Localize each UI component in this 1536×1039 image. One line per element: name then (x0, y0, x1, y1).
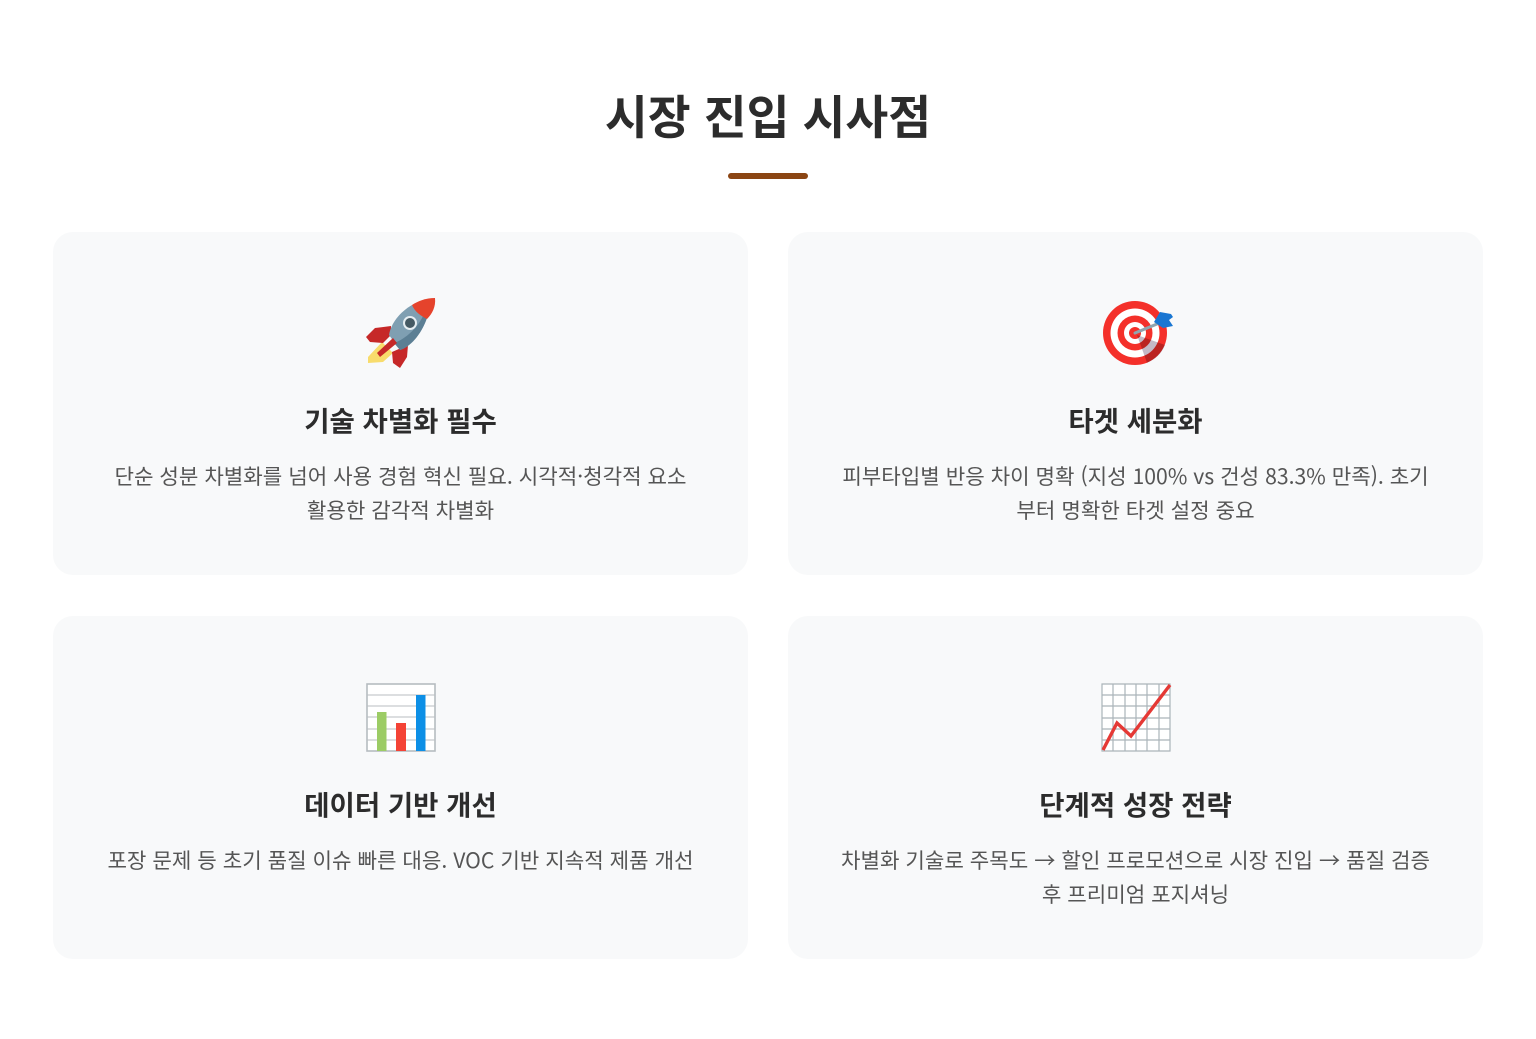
card text (842, 460, 1429, 525)
panel: technology differentiation (53, 232, 748, 575)
card heading: 데이터 기반 개선 (304, 782, 497, 822)
card text: 부터 명확한 타겟 설정 중요 (1016, 494, 1255, 525)
icon: target with dart (1103, 301, 1173, 365)
icon: rocket (366, 298, 436, 368)
panel: target segmentation (788, 232, 1483, 575)
card text: 피부타입별 반응 차이 명확 (지성 100% vs 건성 83.3% 만족). 초기 (842, 460, 1429, 491)
title: 시장 진입 시사점 (605, 80, 931, 148)
card text: 후 프리미엄 포지셔닝 (1042, 878, 1229, 909)
icon: bar chart (366, 683, 436, 752)
card text: 단순 성분 차별화를 넘어 사용 경험 혁신 필요. 시각적·청각적 요소 (114, 460, 687, 491)
title underline (728, 173, 808, 179)
panel: data-driven improvement (53, 616, 748, 959)
icon: line chart (1101, 683, 1172, 752)
card heading: 단계적 성장 전략 (1039, 782, 1232, 822)
card text: 활용한 감각적 차별화 (307, 494, 494, 525)
card text: 포장 문제 등 초기 품질 이슈 빠른 대응. VOC 기반 지속적 제품 개선 (107, 844, 694, 875)
card text (114, 460, 687, 525)
card text (841, 844, 1430, 909)
card heading: 타겟 세분화 (1068, 398, 1203, 438)
card text: 차별화 기술로 주목도 → 할인 프로모션으로 시장 진입 → 품질 검증 (841, 844, 1430, 875)
card heading: 기술 차별화 필수 (304, 398, 497, 438)
panel: staged growth strategy (788, 616, 1483, 959)
